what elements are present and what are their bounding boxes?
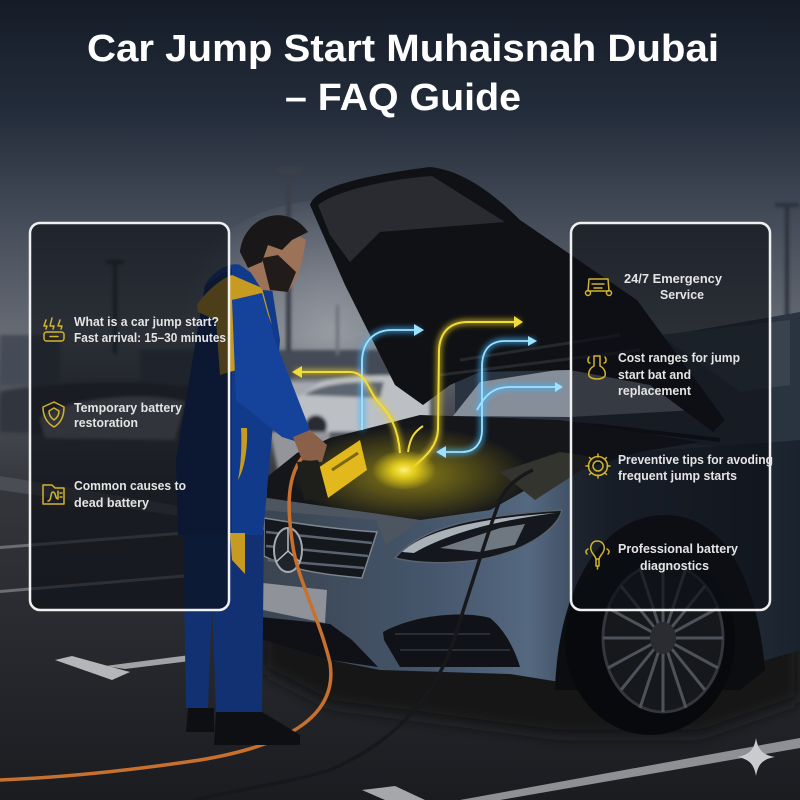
item: preventive tips: frequent jump starts: [618, 469, 737, 483]
right panel: [571, 223, 773, 610]
arrow glows: [295, 322, 560, 467]
item: common causes: Common causes to: [74, 479, 186, 493]
energy arrows: [292, 316, 563, 490]
shadow under car: [262, 620, 800, 735]
license plate: [263, 583, 327, 623]
left panel: [30, 223, 229, 610]
shoes: [186, 708, 300, 745]
orange cable: [0, 458, 331, 780]
title: – FAQ Guide: [285, 77, 521, 119]
item: emergency service: Service: [660, 288, 704, 302]
icon: gear: [586, 454, 610, 478]
item: common causes: [74, 479, 186, 510]
item: battery restoration: Temporary battery: [74, 401, 182, 415]
technician: [0, 215, 331, 780]
item: emergency service: [624, 272, 722, 302]
yellow shoulder: [197, 275, 272, 375]
spark branch: [408, 426, 423, 452]
upper bumper panel: [262, 498, 420, 545]
title: Car Jump Start Muhaisnah Dubai: [87, 28, 719, 70]
icon: battery with bolts: [44, 318, 64, 341]
icon: jump start jar: [588, 356, 606, 379]
item: battery diagnostics: [618, 542, 738, 573]
item: car jump start: [74, 315, 226, 345]
wheel arch and tyre: [555, 515, 765, 690]
item: preventive tips: [618, 453, 773, 483]
item: battery restoration: [74, 401, 182, 430]
windshield and silver car behind: [455, 312, 800, 450]
item: cost ranges: replacement: [618, 384, 692, 398]
legs: [183, 530, 264, 715]
black cable: [195, 470, 533, 800]
arrow: yellow left: [301, 372, 400, 453]
bodywork: [262, 440, 800, 682]
item: emergency service: 24/7 Emergency: [624, 272, 722, 286]
arrow: blue up left: [362, 330, 414, 430]
grille and badge: [264, 518, 377, 578]
item: car jump start: Fast arrival: 15–30 minutes: [74, 331, 226, 345]
wipers: [470, 420, 720, 445]
arrow: yellow top: [413, 322, 514, 467]
spark glow: [372, 450, 436, 490]
arrow: blue right: [445, 341, 528, 452]
icon: emergency vehicle: [586, 279, 612, 296]
icon: shield: [43, 402, 64, 427]
neck and face: [244, 225, 306, 292]
headlight: [395, 510, 562, 563]
item: cost ranges: start bat and: [618, 368, 691, 382]
item: common causes: dead battery: [74, 496, 149, 510]
hand: [293, 430, 327, 462]
engine bay: [267, 415, 700, 520]
torso: [176, 264, 280, 535]
item: cost ranges: [618, 351, 740, 398]
lower intakes: [258, 617, 378, 667]
item: battery diagnostics: diagnostics: [640, 559, 709, 573]
jump starter box: [297, 440, 367, 500]
item: preventive tips: Preventive tips for avoding: [618, 453, 773, 467]
item: cost ranges: Cost ranges for jump: [618, 351, 740, 365]
icon: document circuit: [43, 485, 64, 504]
arm: [232, 293, 310, 444]
item: car jump start: What is a car jump start?: [74, 315, 219, 329]
title: [87, 28, 719, 119]
icon: light bulb: [586, 541, 609, 569]
hair: [240, 215, 308, 268]
arrow: blue lower right: [477, 387, 555, 410]
beard: [262, 255, 296, 292]
icon: sparkle watermark: [737, 738, 775, 776]
car body: [258, 312, 800, 735]
item: battery diagnostics: Professional battery: [618, 542, 738, 556]
open hood: [310, 167, 725, 432]
item: battery restoration: restoration: [74, 416, 138, 430]
